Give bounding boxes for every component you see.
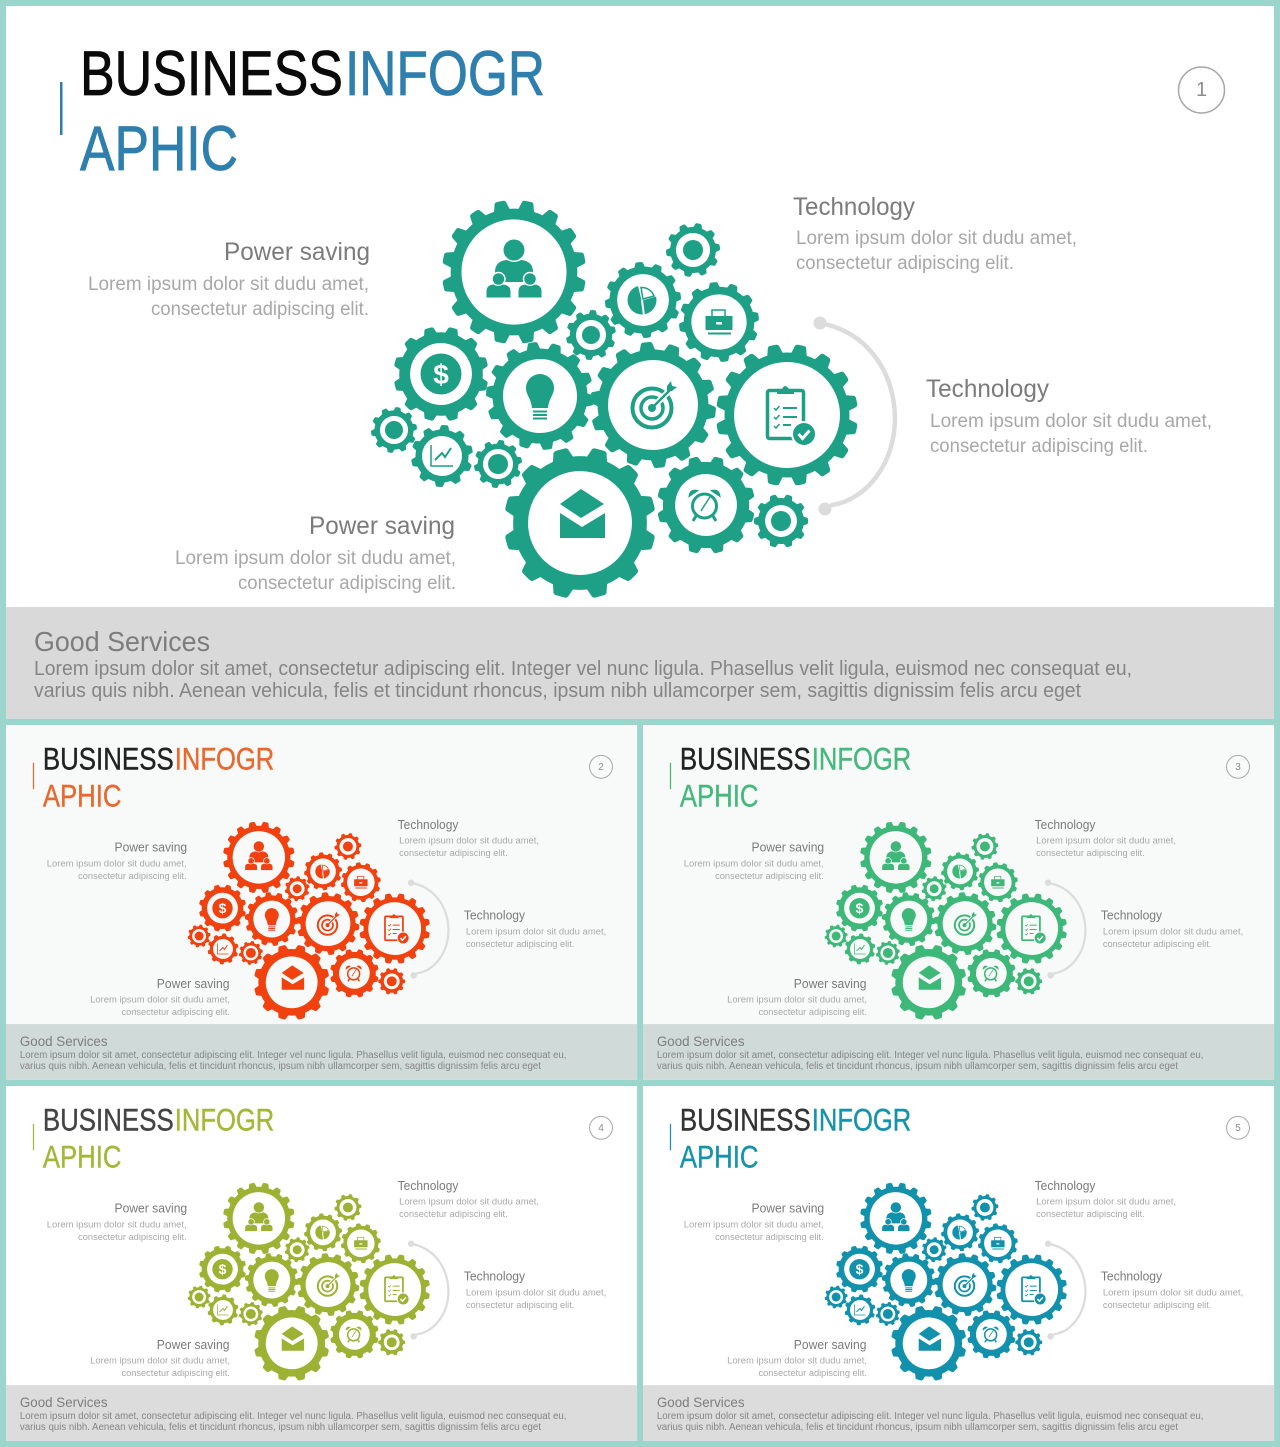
title bbox=[60, 39, 545, 184]
page number bbox=[1227, 755, 1249, 778]
page number: 4 bbox=[598, 1123, 604, 1134]
text blocks: Lorem ipsum dolor sit dudu amet, bbox=[90, 1356, 230, 1367]
gear: people bbox=[429, 187, 599, 357]
text blocks: Lorem ipsum dolor sit dudu amet, bbox=[399, 1196, 539, 1207]
text block: power saving top bbox=[88, 238, 370, 320]
arc connector bbox=[814, 316, 895, 516]
band: good services: varius quis nibh. Aenean vehicula, felis et tincidunt rhoncus, ipsum nibh ullamcorper sem, sagittis dignissim felis arcu eget bbox=[20, 1061, 541, 1072]
band: good services: Lorem ipsum dolor sit amet, consectetur adipiscing elit. Integer vel nunc ligula. Phasellus velit ligula, euismod nec consequat eu, bbox=[657, 1411, 1203, 1422]
page number: 2 bbox=[598, 762, 604, 773]
text blocks: Power saving bbox=[794, 1338, 867, 1352]
title: INFOGR bbox=[175, 1102, 274, 1137]
panel: main slide bbox=[6, 6, 1274, 719]
gear cluster teal bbox=[823, 1176, 1085, 1390]
page number bbox=[1178, 67, 1224, 113]
band: good services bbox=[643, 1024, 1274, 1080]
title bbox=[670, 1102, 911, 1175]
gear: plain lower bbox=[471, 437, 525, 491]
gear: target bbox=[583, 336, 723, 474]
text blocks: consectetur adipiscing elit. bbox=[399, 848, 508, 859]
text blocks: Lorem ipsum dolor sit dudu amet, bbox=[399, 835, 539, 846]
band: good services: varius quis nibh. Aenean vehicula, felis et tincidunt rhoncus, ipsum nibh ullamcorper sem, sagittis dignissim felis arcu eget bbox=[34, 680, 1081, 702]
title: APHIC bbox=[80, 114, 238, 184]
band: good services bbox=[643, 1385, 1274, 1441]
gear: plain center bbox=[564, 308, 618, 362]
text blocks: consectetur adipiscing elit. bbox=[121, 1368, 230, 1379]
gear: line chart bbox=[408, 422, 476, 490]
title: INFOGR bbox=[812, 741, 911, 776]
gear: mail bbox=[487, 430, 673, 616]
title: BUSINESS bbox=[80, 39, 343, 109]
text blocks: Lorem ipsum dolor sit dudu amet, bbox=[1036, 835, 1176, 846]
text block: technology right: consectetur adipiscing elit. bbox=[930, 436, 1148, 457]
gear: clipboard bbox=[704, 332, 870, 498]
page number bbox=[590, 755, 612, 778]
text block: power saving bottom bbox=[175, 512, 456, 594]
band: good services: Lorem ipsum dolor sit amet, consectetur adipiscing elit. Integer vel nunc ligula. Phasellus velit ligula, euismod nec consequat eu, bbox=[20, 1050, 566, 1061]
text blocks: consectetur adipiscing elit. bbox=[1036, 848, 1145, 859]
title: BUSINESS bbox=[43, 741, 174, 776]
text blocks: Power saving bbox=[751, 840, 824, 854]
band: good services: Good Services bbox=[20, 1394, 108, 1410]
band: good services bbox=[6, 1024, 637, 1080]
text blocks: Lorem ipsum dolor sit dudu amet, bbox=[727, 1356, 867, 1367]
gear cluster bbox=[367, 187, 895, 616]
text blocks: Lorem ipsum dolor sit dudu amet, bbox=[47, 1219, 187, 1230]
title: BUSINESS bbox=[680, 1102, 811, 1137]
text blocks: Lorem ipsum dolor sit dudu amet, bbox=[684, 1219, 824, 1230]
title: INFOGR bbox=[345, 39, 545, 109]
gear: alarm clock bbox=[646, 445, 766, 565]
text blocks bbox=[47, 818, 606, 1018]
text blocks: Lorem ipsum dolor sit dudu amet, bbox=[1103, 927, 1243, 938]
text block: power saving top: Power saving bbox=[224, 238, 370, 266]
text blocks: consectetur adipiscing elit. bbox=[715, 1232, 824, 1243]
band: good services: Good Services bbox=[20, 1033, 108, 1049]
panel: slide 3 green bbox=[643, 725, 1274, 1080]
text blocks: consectetur adipiscing elit. bbox=[1103, 1300, 1211, 1311]
text blocks: Technology bbox=[398, 1179, 459, 1193]
gear: plain right bbox=[747, 487, 815, 555]
panel: slide 5 teal bbox=[643, 1086, 1274, 1441]
text blocks: consectetur adipiscing elit. bbox=[1036, 1209, 1145, 1220]
text blocks: Lorem ipsum dolor sit dudu amet, bbox=[1036, 1196, 1176, 1207]
text blocks: Power saving bbox=[157, 977, 230, 991]
text blocks: Lorem ipsum dolor sit dudu amet, bbox=[466, 927, 606, 938]
text block: technology right: Technology bbox=[926, 375, 1049, 403]
band: good services: Lorem ipsum dolor sit amet, consectetur adipiscing elit. Integer vel nunc ligula. Phasellus velit ligula, euismod nec consequat eu, bbox=[20, 1411, 566, 1422]
text blocks: Technology bbox=[1035, 1179, 1096, 1193]
band: good services: Good Services bbox=[34, 626, 210, 657]
text blocks: Power saving bbox=[157, 1338, 230, 1352]
text blocks: Power saving bbox=[794, 977, 867, 991]
band: good services: Lorem ipsum dolor sit amet, consectetur adipiscing elit. Integer vel nunc ligula. Phasellus velit ligula, euismod nec consequat eu, bbox=[34, 658, 1132, 680]
title: APHIC bbox=[43, 779, 121, 814]
text blocks bbox=[684, 818, 1243, 1018]
text blocks: Technology bbox=[464, 1270, 526, 1284]
title bbox=[670, 741, 911, 814]
text blocks: Technology bbox=[398, 818, 459, 832]
band: good services: Good Services bbox=[657, 1033, 745, 1049]
text blocks: Power saving bbox=[114, 1201, 187, 1215]
band: good services: varius quis nibh. Aenean vehicula, felis et tincidunt rhoncus, ipsum nibh ullamcorper sem, sagittis dignissim felis arcu eget bbox=[657, 1422, 1178, 1433]
title: APHIC bbox=[43, 1140, 121, 1175]
text blocks: consectetur adipiscing elit. bbox=[121, 1007, 230, 1018]
text block: power saving bottom: Power saving bbox=[309, 512, 455, 540]
text blocks: consectetur adipiscing elit. bbox=[758, 1007, 867, 1018]
text blocks: consectetur adipiscing elit. bbox=[1103, 939, 1211, 950]
title: INFOGR bbox=[812, 1102, 911, 1137]
text blocks: Technology bbox=[1101, 909, 1163, 923]
text block: power saving bottom: consectetur adipiscing elit. bbox=[238, 573, 456, 594]
text block: technology top: consectetur adipiscing elit. bbox=[796, 253, 1014, 274]
text blocks: consectetur adipiscing elit. bbox=[758, 1368, 867, 1379]
gear: dollar: $ bbox=[433, 359, 449, 390]
text blocks: Lorem ipsum dolor sit dudu amet, bbox=[47, 858, 187, 869]
band: good services: varius quis nibh. Aenean vehicula, felis et tincidunt rhoncus, ipsum nibh ullamcorper sem, sagittis dignissim felis arcu eget bbox=[20, 1422, 541, 1433]
text block: technology top: Technology bbox=[793, 193, 915, 221]
text block: technology right bbox=[926, 375, 1212, 457]
text blocks: Power saving bbox=[114, 840, 187, 854]
gear cluster orange bbox=[186, 815, 448, 1029]
text blocks: consectetur adipiscing elit. bbox=[466, 939, 574, 950]
title bbox=[33, 1102, 274, 1175]
text blocks: Lorem ipsum dolor sit dudu amet, bbox=[1103, 1288, 1243, 1299]
text blocks: Lorem ipsum dolor sit dudu amet, bbox=[684, 858, 824, 869]
title: INFOGR bbox=[175, 741, 274, 776]
text block: technology right: Lorem ipsum dolor sit dudu amet, bbox=[930, 411, 1212, 432]
gear cluster green bbox=[823, 815, 1085, 1029]
text blocks: Power saving bbox=[751, 1201, 824, 1215]
text block: power saving bottom: Lorem ipsum dolor sit dudu amet, bbox=[175, 548, 456, 569]
text blocks: consectetur adipiscing elit. bbox=[399, 1209, 508, 1220]
gear cluster olive bbox=[186, 1176, 448, 1390]
gear: bulb bbox=[479, 335, 601, 457]
text blocks bbox=[47, 1179, 606, 1379]
text blocks: consectetur adipiscing elit. bbox=[715, 871, 824, 882]
gear: briefcase bbox=[674, 277, 764, 367]
text block: power saving top: Lorem ipsum dolor sit dudu amet, bbox=[88, 274, 369, 295]
title: BUSINESS bbox=[43, 1102, 174, 1137]
text blocks: Technology bbox=[1101, 1270, 1163, 1284]
text blocks: Lorem ipsum dolor sit dudu amet, bbox=[727, 995, 867, 1006]
text blocks: Technology bbox=[1035, 818, 1096, 832]
text block: technology top: Lorem ipsum dolor sit dudu amet, bbox=[796, 228, 1077, 249]
title bbox=[33, 741, 274, 814]
band: good services: Lorem ipsum dolor sit amet, consectetur adipiscing elit. Integer vel nunc ligula. Phasellus velit ligula, euismod nec consequat eu, bbox=[657, 1050, 1203, 1061]
band: good services: varius quis nibh. Aenean vehicula, felis et tincidunt rhoncus, ipsum nibh ullamcorper sem, sagittis dignissim felis arcu eget bbox=[657, 1061, 1178, 1072]
text block: power saving top: consectetur adipiscing elit. bbox=[151, 299, 369, 320]
title: BUSINESS bbox=[680, 741, 811, 776]
page number bbox=[590, 1116, 612, 1139]
text blocks: Lorem ipsum dolor sit dudu amet, bbox=[90, 995, 230, 1006]
title: APHIC bbox=[680, 1140, 758, 1175]
text blocks: consectetur adipiscing elit. bbox=[78, 871, 187, 882]
page number: 1 bbox=[1196, 79, 1207, 101]
band: good services bbox=[6, 607, 1274, 719]
gear: plain left bbox=[367, 403, 421, 457]
text block: technology top bbox=[793, 193, 1077, 274]
panel: slide 2 orange bbox=[6, 725, 637, 1080]
gear: dollar bbox=[383, 316, 499, 432]
panel: slide 4 olive bbox=[6, 1086, 637, 1441]
text blocks: Technology bbox=[464, 909, 526, 923]
title: APHIC bbox=[680, 779, 758, 814]
page number bbox=[1227, 1116, 1249, 1139]
gear: pie chart bbox=[601, 258, 685, 342]
text blocks: consectetur adipiscing elit. bbox=[78, 1232, 187, 1243]
text blocks: consectetur adipiscing elit. bbox=[466, 1300, 574, 1311]
band: good services bbox=[6, 1385, 637, 1441]
text blocks: Lorem ipsum dolor sit dudu amet, bbox=[466, 1288, 606, 1299]
band: good services: Good Services bbox=[657, 1394, 745, 1410]
page number: 3 bbox=[1235, 762, 1241, 773]
text blocks bbox=[684, 1179, 1243, 1379]
page number: 5 bbox=[1235, 1123, 1241, 1134]
gear: plain top bbox=[661, 218, 725, 282]
